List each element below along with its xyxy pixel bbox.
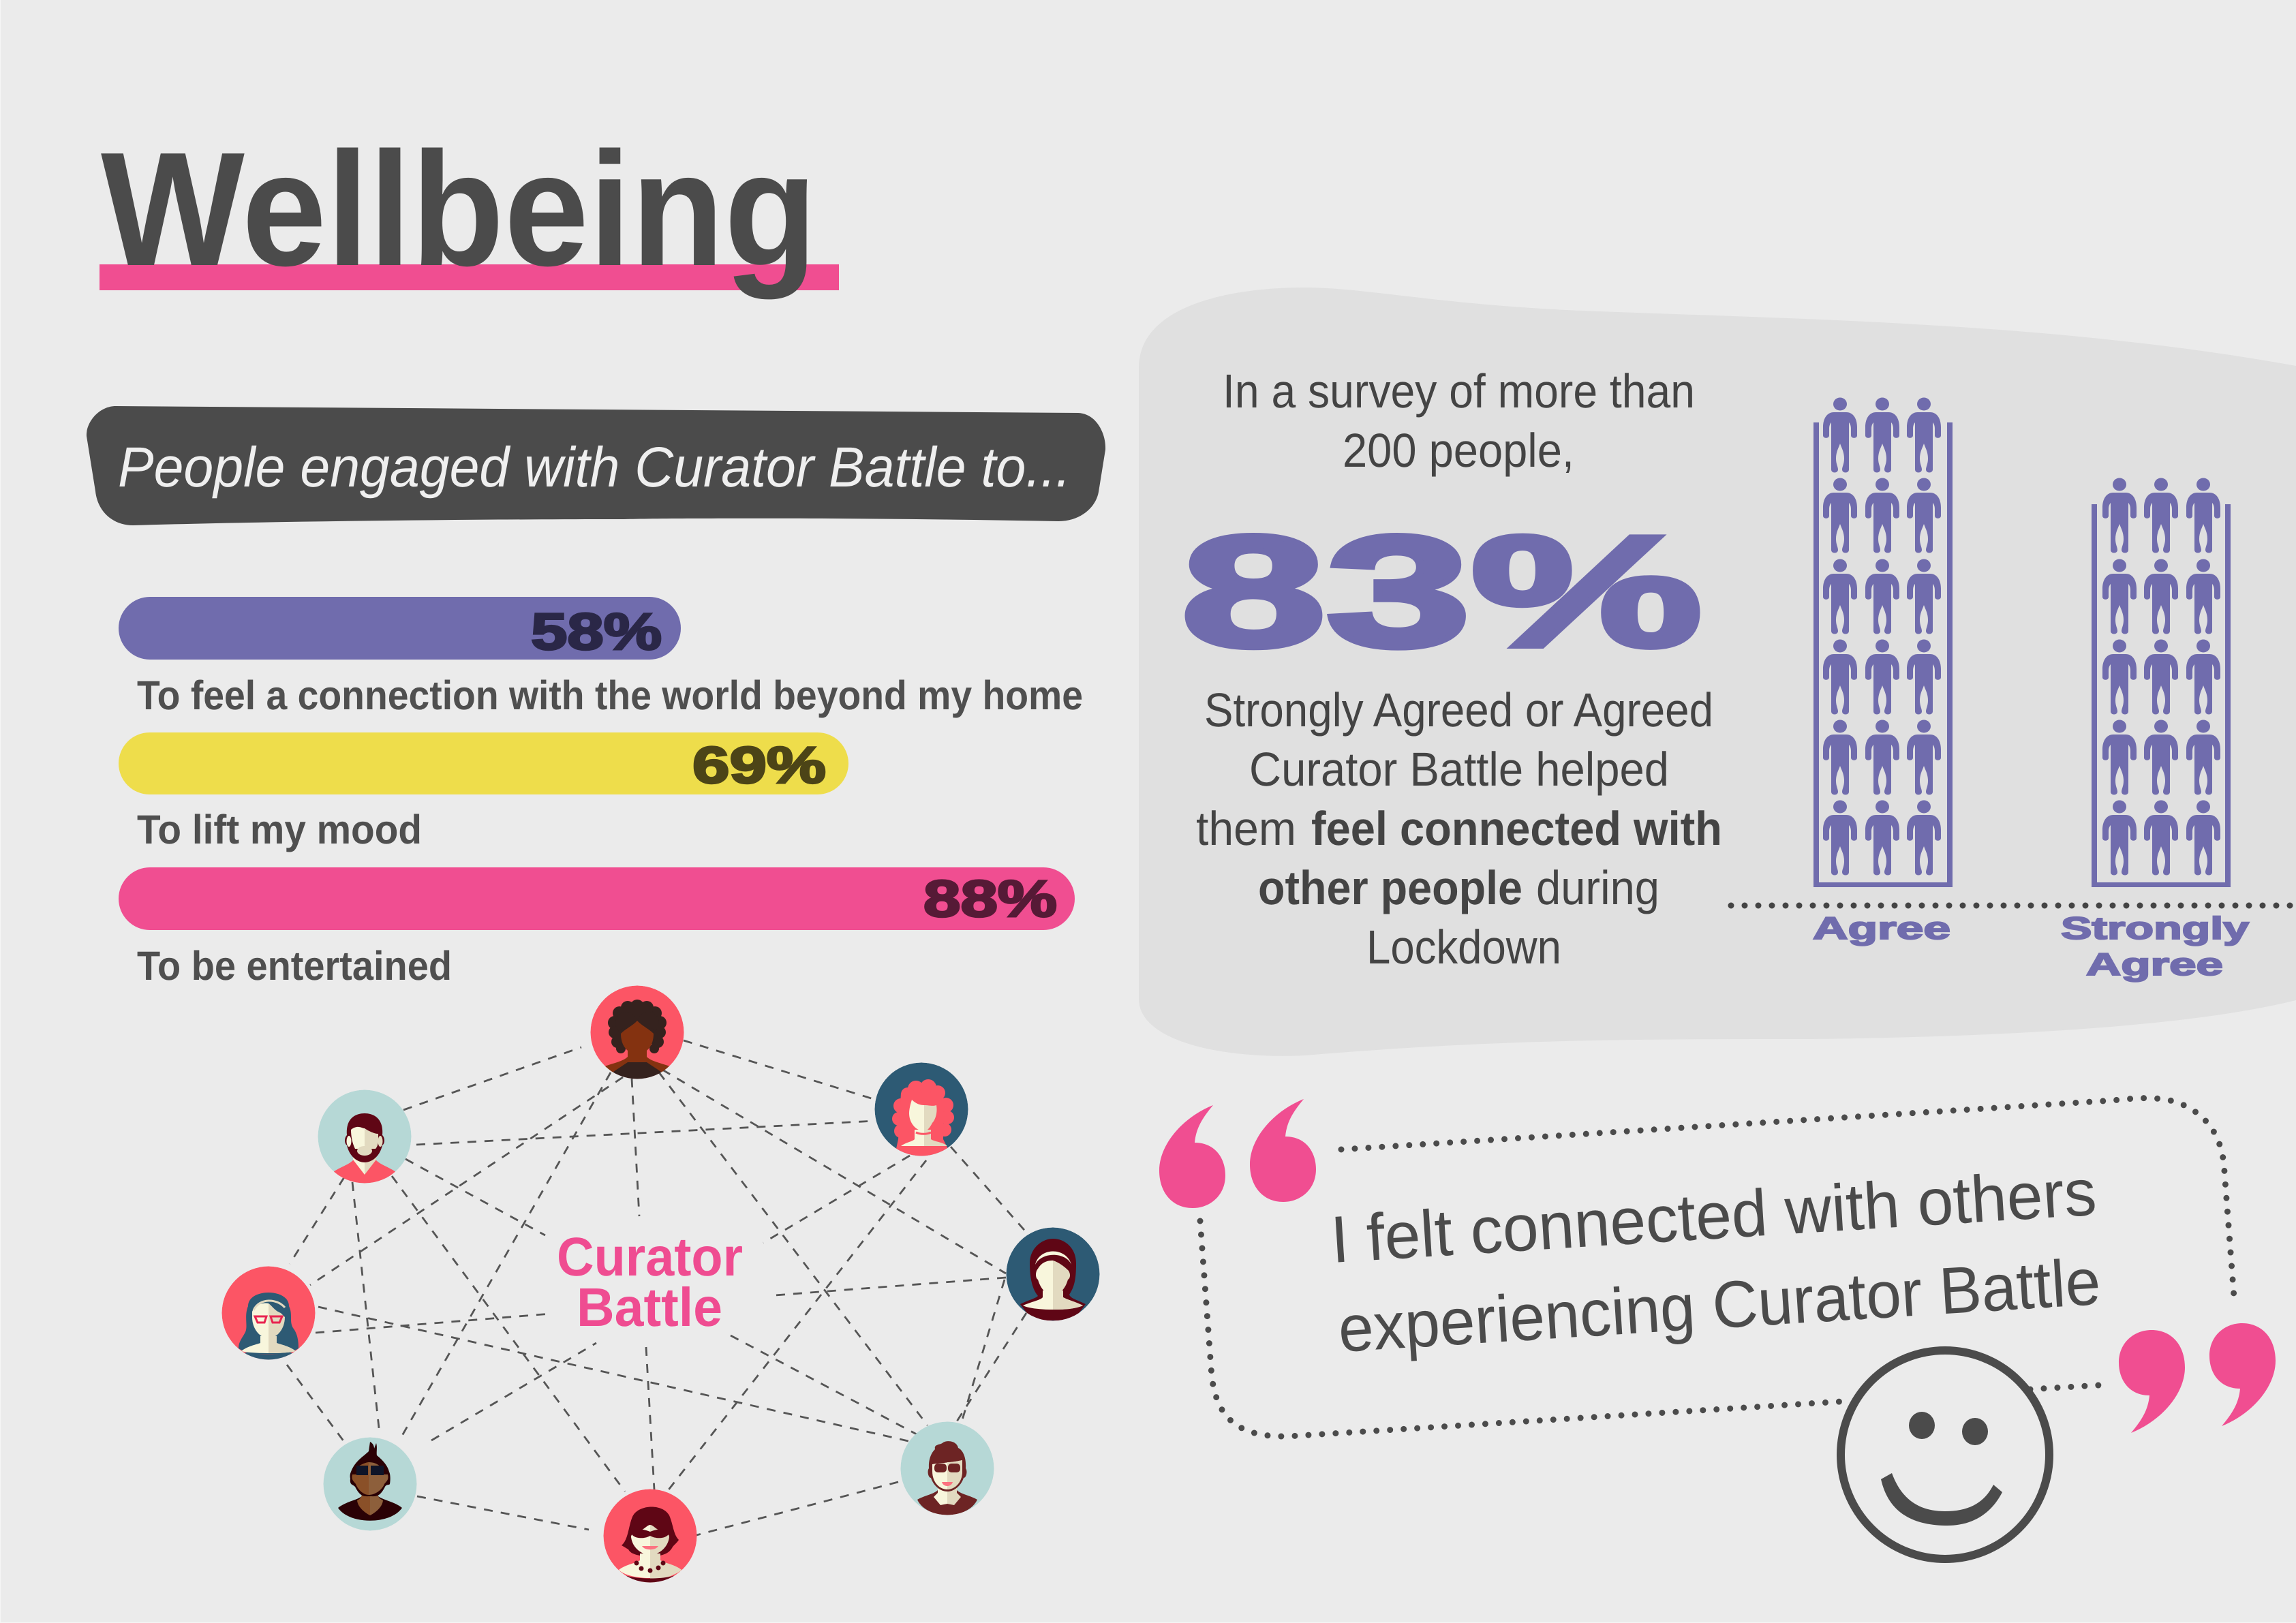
frame: Agree <box>1813 422 1953 887</box>
axis labels: Strongly <box>2061 910 2250 946</box>
intro text <box>1223 365 1695 477</box>
label: entertained: To be entertained <box>137 943 452 989</box>
avatar: man with sunglasses and quiff <box>901 1421 994 1515</box>
frame: Strongly Agree <box>2092 504 2231 887</box>
description text: them <box>1196 802 1296 855</box>
title underline <box>100 264 839 290</box>
icon: closing quotation mark <box>2119 1323 2276 1433</box>
panel: survey result <box>1139 288 2296 1056</box>
description text: other people <box>1258 861 1522 914</box>
avatar: man with spiky hair <box>323 1438 417 1530</box>
avatar: bearded man <box>318 1090 412 1183</box>
dotted quote border <box>1200 1098 2235 1436</box>
pictogram: Agree <box>1813 398 1953 887</box>
icon: smiley face <box>1841 1350 2049 1559</box>
title: Wellbeing <box>100 119 839 300</box>
pictogram: Strongly Agree <box>2092 478 2231 887</box>
center label: Curator <box>557 1226 743 1287</box>
description text: Lockdown <box>1366 921 1561 974</box>
bar 58%: 58% <box>531 603 662 661</box>
people: Strongly Agree <box>2102 478 2220 875</box>
network diagram: Curator Battle <box>222 985 1100 1585</box>
center label: Battle <box>577 1277 722 1338</box>
panel background <box>1139 288 2296 1056</box>
callout: quote <box>1159 1098 2276 1559</box>
bar 88%: 88% <box>923 870 1057 928</box>
bar chart: reasons for engaging <box>119 597 1083 989</box>
axis labels: Agree <box>1813 910 1950 946</box>
bar 69% <box>119 732 848 794</box>
avatar: woman with afro <box>590 985 684 1079</box>
banner text: People engaged with Curator Battle to... <box>118 435 1071 499</box>
bar 88% <box>119 867 1075 930</box>
quote text <box>1328 1155 2102 1366</box>
axis labels <box>1813 910 2250 982</box>
quote text: I felt connected with others <box>1328 1155 2098 1277</box>
description text <box>1196 683 1722 974</box>
people: Agree <box>1823 398 1941 875</box>
intro text: In a survey of more than <box>1223 365 1695 418</box>
icon: opening quotation mark <box>1159 1099 1316 1208</box>
banner shape <box>87 406 1105 525</box>
intro text: 200 people, <box>1343 424 1574 477</box>
dashed connections <box>287 1040 1028 1535</box>
quote text: experiencing Curator Battle <box>1336 1244 2102 1366</box>
avatar: woman with headband <box>1006 1228 1100 1320</box>
description text: during <box>1536 861 1659 914</box>
bar 58% <box>119 597 681 661</box>
description text: Curator Battle helped <box>1249 743 1669 796</box>
description text: feel connected with <box>1311 802 1722 855</box>
label: lift my mood: To lift my mood <box>137 807 422 852</box>
bar 69%: 69% <box>692 737 826 794</box>
label: connection with the world: To feel a connection with the world beyond my home <box>137 673 1083 718</box>
avatar: woman with red hair <box>875 1063 968 1158</box>
axis labels: Agree <box>2086 946 2223 982</box>
avatar: woman with red glasses <box>222 1266 315 1362</box>
heading banner <box>87 406 1105 525</box>
description text: Strongly Agreed or Agreed <box>1204 683 1713 737</box>
avatar: woman with dark glasses <box>604 1489 697 1585</box>
big stat: 83%: 83% <box>1181 504 1702 680</box>
title text: Wellbeing <box>101 119 817 300</box>
